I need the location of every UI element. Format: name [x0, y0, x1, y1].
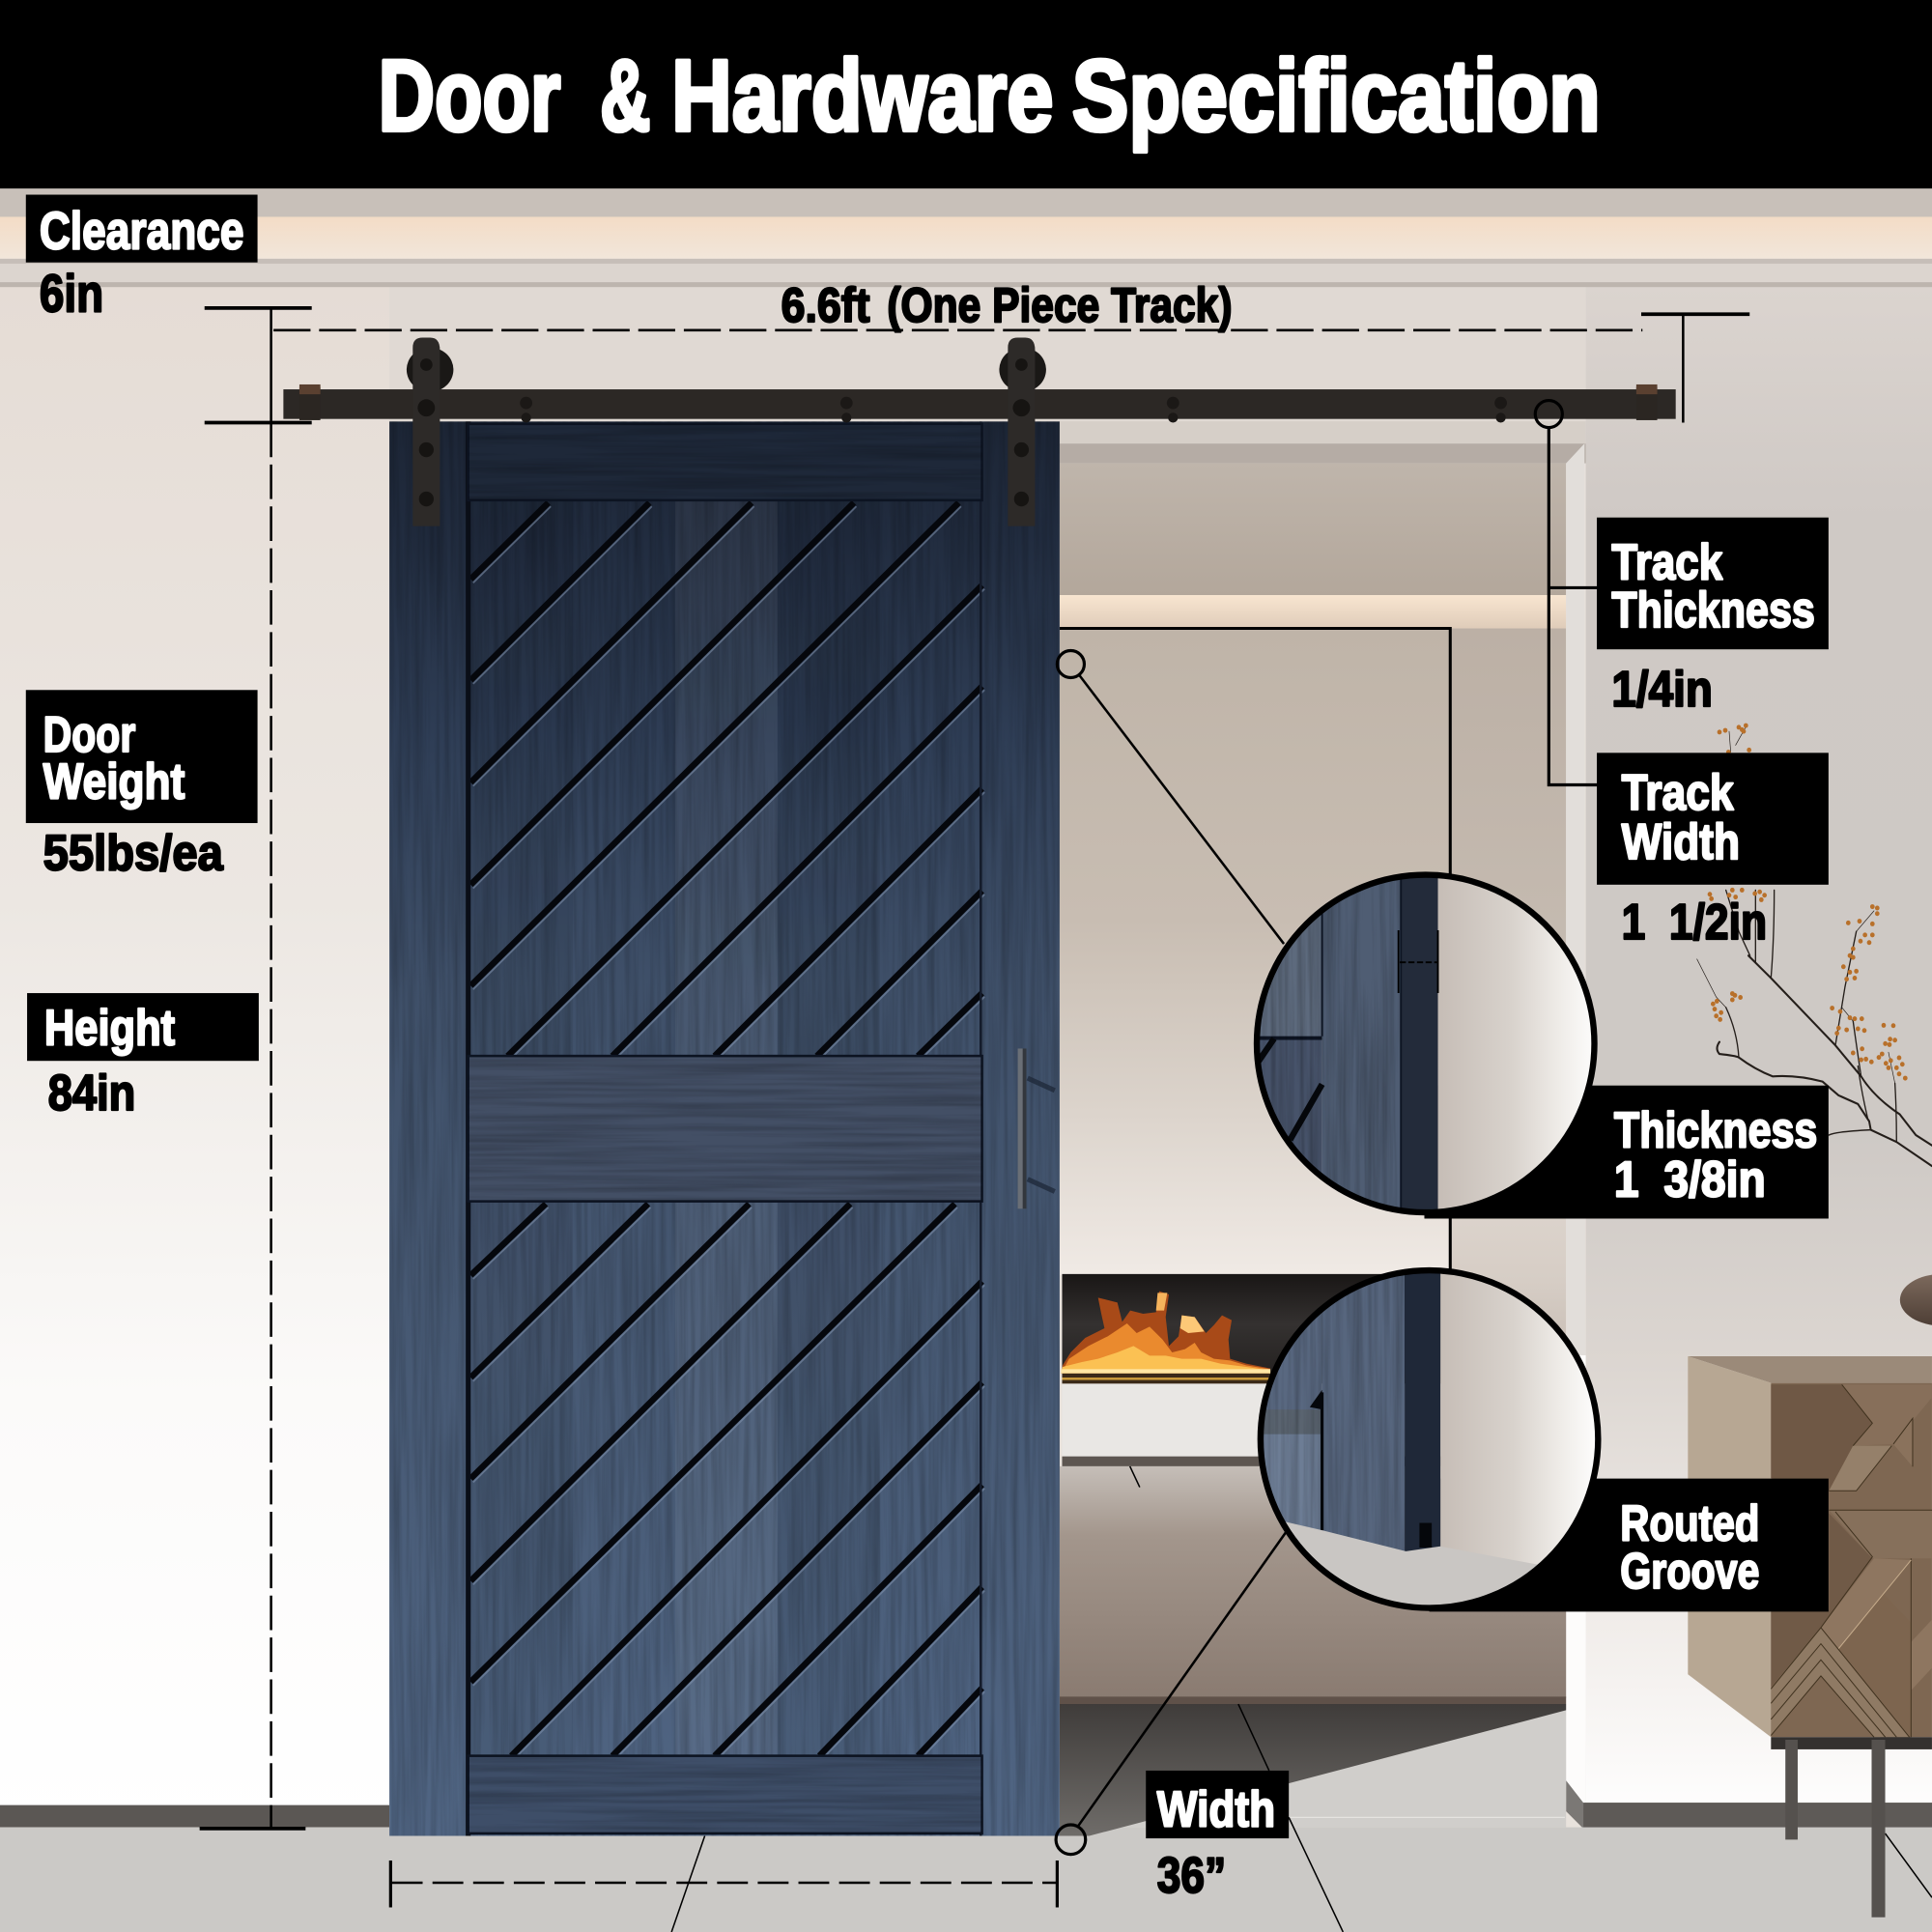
sliding track — [283, 384, 1676, 423]
flames — [1061, 1292, 1270, 1374]
title: Door — [379, 40, 560, 153]
label: door weight: 55lbs/ea — [43, 826, 224, 882]
label: track width — [1597, 753, 1829, 951]
label: door thickness — [1614, 1103, 1817, 1208]
label: routed groove: Groove — [1620, 1544, 1759, 1600]
panel: routed groove label box — [1430, 1479, 1829, 1611]
label: track width: 1 1/2in — [1622, 895, 1767, 951]
label: width: Width — [1157, 1781, 1275, 1837]
label: door thickness: 1 3/8in — [1614, 1152, 1766, 1208]
label: track length: (One Piece Track) — [887, 278, 1233, 332]
bottom rail — [469, 1756, 982, 1833]
label: height: 84in — [48, 1065, 135, 1122]
title — [379, 40, 1601, 153]
label: door weight: Weight — [43, 754, 185, 810]
label: routed groove — [1620, 1495, 1759, 1600]
pointer: routed groove — [1056, 1531, 1287, 1855]
magnifier: routed groove detail — [1258, 1269, 1601, 1614]
sideboard cabinet — [1688, 1356, 1932, 1749]
panel: thickness label box — [1424, 1086, 1829, 1218]
track bolts — [520, 397, 1507, 423]
middle rail — [469, 1056, 982, 1202]
cabinet legs — [1785, 1740, 1886, 1918]
title: & — [600, 40, 650, 153]
hanger left — [407, 337, 453, 526]
label: height: Height — [44, 1001, 175, 1057]
magnifier: door thickness detail — [1256, 872, 1601, 1217]
label: track width: Track — [1622, 765, 1734, 821]
label: height — [27, 993, 259, 1122]
branch with berries — [1697, 724, 1932, 1166]
track stops — [299, 384, 1658, 420]
door height and clearance dimension lines — [200, 308, 312, 1829]
thickness marker — [1399, 930, 1438, 993]
stile shadow gaps — [467, 421, 470, 1836]
label: door weight: Door — [43, 707, 135, 763]
hanger right — [999, 337, 1046, 526]
label: track thickness: Track — [1611, 534, 1723, 590]
diagonal grooves — [470, 502, 984, 1759]
label: clearance: 6in — [40, 264, 103, 324]
label: door thickness: Thickness — [1614, 1102, 1817, 1158]
vase — [1900, 1274, 1932, 1325]
label: track length: 6.6ft — [781, 278, 870, 332]
label: track thickness: Thickness — [1611, 582, 1815, 639]
door handle — [1018, 1048, 1055, 1208]
label: width — [1146, 1771, 1289, 1904]
title: Specification — [1072, 40, 1601, 153]
label: track thickness: 1/4in — [1611, 662, 1713, 718]
label: routed groove: Routed — [1620, 1495, 1759, 1551]
door width dimension line — [390, 1861, 1057, 1907]
floor seams — [671, 1466, 1932, 1932]
label: track width: Width — [1622, 814, 1740, 870]
pointer: track callouts — [1535, 401, 1598, 784]
fireplace — [1061, 1274, 1454, 1466]
label: clearance: Clearance — [40, 201, 244, 261]
barn door — [389, 421, 1060, 1836]
planks — [470, 500, 880, 1757]
label: clearance — [26, 195, 258, 324]
title banner — [0, 0, 1932, 188]
title: Hardware — [671, 40, 1054, 153]
label: door weight — [26, 690, 258, 882]
top rail — [469, 424, 982, 500]
label: track length — [781, 278, 1233, 332]
pointer: door thickness — [1057, 629, 1450, 1275]
label: width: 36” — [1157, 1848, 1226, 1904]
label: track thickness — [1597, 518, 1829, 718]
track length dimension line — [273, 314, 1749, 423]
